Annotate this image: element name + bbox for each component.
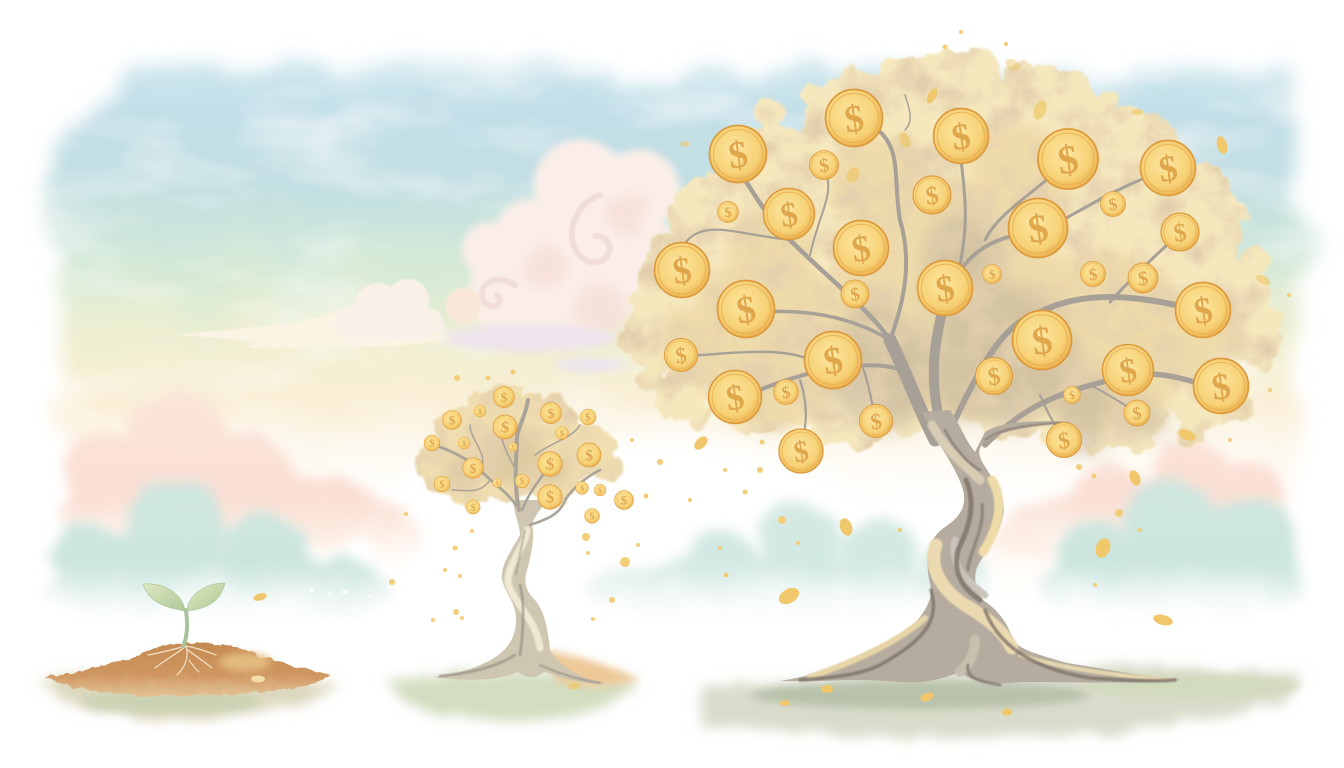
coin: $ xyxy=(988,267,997,282)
coin: $ xyxy=(1108,194,1119,214)
small trunk xyxy=(433,500,607,684)
lower wisp xyxy=(554,358,626,372)
small tree coins: $ xyxy=(580,483,585,493)
stem xyxy=(183,610,187,646)
big trunk xyxy=(780,410,1182,683)
big tree xyxy=(618,48,1284,685)
coin: $ xyxy=(674,342,688,368)
roots xyxy=(148,646,216,675)
coin xyxy=(1102,344,1154,396)
small branches xyxy=(434,400,600,525)
cream wash right xyxy=(1080,674,1300,698)
coin: $ xyxy=(818,155,831,177)
small tree coins: $ xyxy=(500,390,508,406)
small tree coins: $ xyxy=(511,444,515,451)
trunk cream strands xyxy=(810,425,1170,680)
coin xyxy=(976,358,1012,394)
small tree coins: $ xyxy=(560,428,565,438)
canopy shadow layer xyxy=(825,218,1163,446)
coin xyxy=(779,429,823,473)
cloud lilac shadow xyxy=(445,324,615,352)
coin xyxy=(1128,263,1158,293)
watercolor sky wash xyxy=(40,60,1305,520)
small tree coins: $ xyxy=(621,493,628,507)
ground mist right xyxy=(700,665,1305,738)
small tree coins xyxy=(424,386,634,524)
coin xyxy=(1046,422,1082,458)
big canopy xyxy=(618,48,1284,454)
coin xyxy=(1008,198,1068,258)
coin xyxy=(1064,386,1080,404)
coin xyxy=(1161,213,1199,251)
trunk dark streaks xyxy=(800,423,1175,685)
small tree coins: $ xyxy=(585,412,591,424)
coin: $ xyxy=(821,339,846,384)
coin xyxy=(810,150,838,180)
ground green patch left xyxy=(80,690,260,714)
falling gold flakes xyxy=(252,57,1272,716)
coin: $ xyxy=(1131,403,1143,424)
ground mist left xyxy=(40,672,340,721)
ground band xyxy=(40,650,1305,738)
white sparkle dots left xyxy=(310,586,392,612)
small trunk highlights xyxy=(440,530,600,683)
coin xyxy=(1124,400,1150,426)
coin xyxy=(804,332,862,388)
big tree coins xyxy=(654,90,1248,473)
coin: $ xyxy=(849,284,861,306)
coin: $ xyxy=(1068,389,1076,402)
left leaf xyxy=(143,584,185,611)
coin: $ xyxy=(778,195,800,235)
small tree coins: $ xyxy=(495,480,499,487)
coin xyxy=(710,126,766,182)
orange earth by small tree xyxy=(545,650,640,686)
small tree coins: $ xyxy=(546,455,554,474)
seedling on soil mound xyxy=(45,583,330,695)
coin: $ xyxy=(724,205,733,221)
coin: $ xyxy=(1137,267,1150,291)
canopy pale layer xyxy=(618,48,1284,454)
coin: $ xyxy=(849,228,873,271)
coin: $ xyxy=(1209,366,1233,409)
teal cloud left xyxy=(45,480,395,626)
coin: $ xyxy=(949,116,973,159)
small tree coins: $ xyxy=(501,419,509,437)
small tree coins: $ xyxy=(471,502,476,513)
coin xyxy=(764,188,814,240)
small tree coins: $ xyxy=(520,476,525,487)
coin xyxy=(826,90,882,146)
coin xyxy=(1012,310,1072,370)
coin xyxy=(718,202,738,222)
small tree coins: $ xyxy=(546,488,554,507)
small wispy cloud xyxy=(175,279,450,348)
soil highlight xyxy=(219,653,271,671)
coin xyxy=(982,264,1002,284)
pink cloud left xyxy=(60,392,421,566)
coin: $ xyxy=(1172,217,1189,248)
wisp streak xyxy=(175,308,450,348)
coin: $ xyxy=(1088,264,1099,284)
coin xyxy=(718,280,774,338)
small tree coins: $ xyxy=(439,479,445,491)
puffs xyxy=(334,279,445,340)
middle teal cloud xyxy=(580,503,991,620)
coin xyxy=(1194,358,1248,414)
coin xyxy=(1080,262,1106,286)
small tree coins: $ xyxy=(429,438,435,450)
cloud pink shading xyxy=(523,193,647,336)
peach curl xyxy=(445,288,481,324)
coin: $ xyxy=(723,376,747,419)
coin: $ xyxy=(1117,351,1139,391)
small tree coins: $ xyxy=(462,439,466,448)
left clouds: pink and teal xyxy=(45,392,421,626)
soil mound xyxy=(45,643,330,695)
coin xyxy=(918,260,972,316)
pink cloud right xyxy=(986,438,1285,594)
coin xyxy=(834,220,888,276)
coin xyxy=(1140,140,1196,196)
big branches xyxy=(681,95,1222,450)
green wash xyxy=(750,681,1090,709)
coin xyxy=(664,338,698,372)
small tree coins: $ xyxy=(547,406,555,422)
coin xyxy=(708,370,762,424)
small tree coins: $ xyxy=(589,511,595,522)
right leaf xyxy=(187,583,225,611)
canopy tan layer xyxy=(659,125,1242,430)
ground mist centre xyxy=(385,670,640,722)
coin: $ xyxy=(1057,427,1072,455)
coin xyxy=(841,280,869,308)
coin: $ xyxy=(1029,318,1055,364)
coin: $ xyxy=(1025,206,1051,252)
swirling pink cloud xyxy=(378,139,688,372)
coin: $ xyxy=(792,435,811,469)
coin: $ xyxy=(1055,136,1081,183)
small tree coins: $ xyxy=(449,413,456,427)
coin: $ xyxy=(726,133,751,178)
coin: $ xyxy=(1156,148,1180,191)
coin: $ xyxy=(1191,290,1215,333)
coin xyxy=(1176,282,1230,338)
coin xyxy=(1100,192,1126,216)
coin: $ xyxy=(670,250,694,293)
coin xyxy=(774,380,798,404)
centre glow xyxy=(390,435,850,585)
coin xyxy=(654,242,710,298)
cloud body xyxy=(462,139,688,348)
coin: $ xyxy=(986,363,1002,391)
swirl strokes xyxy=(378,195,609,306)
coin xyxy=(934,108,988,164)
coin: $ xyxy=(933,268,957,311)
coin: $ xyxy=(842,97,867,142)
coin xyxy=(913,176,951,214)
small tree coins: $ xyxy=(478,407,482,416)
coin xyxy=(1038,129,1098,189)
coin: $ xyxy=(734,288,759,333)
coin: $ xyxy=(781,382,792,402)
small tree coins: $ xyxy=(470,462,477,477)
pebble xyxy=(251,676,265,682)
small tree xyxy=(415,384,634,684)
right clouds: pink and teal xyxy=(986,438,1307,621)
coin xyxy=(860,404,892,438)
small tree coins: $ xyxy=(598,486,602,495)
coin: $ xyxy=(924,180,941,211)
small canopy xyxy=(415,384,623,507)
small tree coins: $ xyxy=(585,447,593,465)
teal cloud right xyxy=(1040,479,1307,621)
gold dot scatter xyxy=(389,30,1291,622)
coin: $ xyxy=(869,408,883,434)
